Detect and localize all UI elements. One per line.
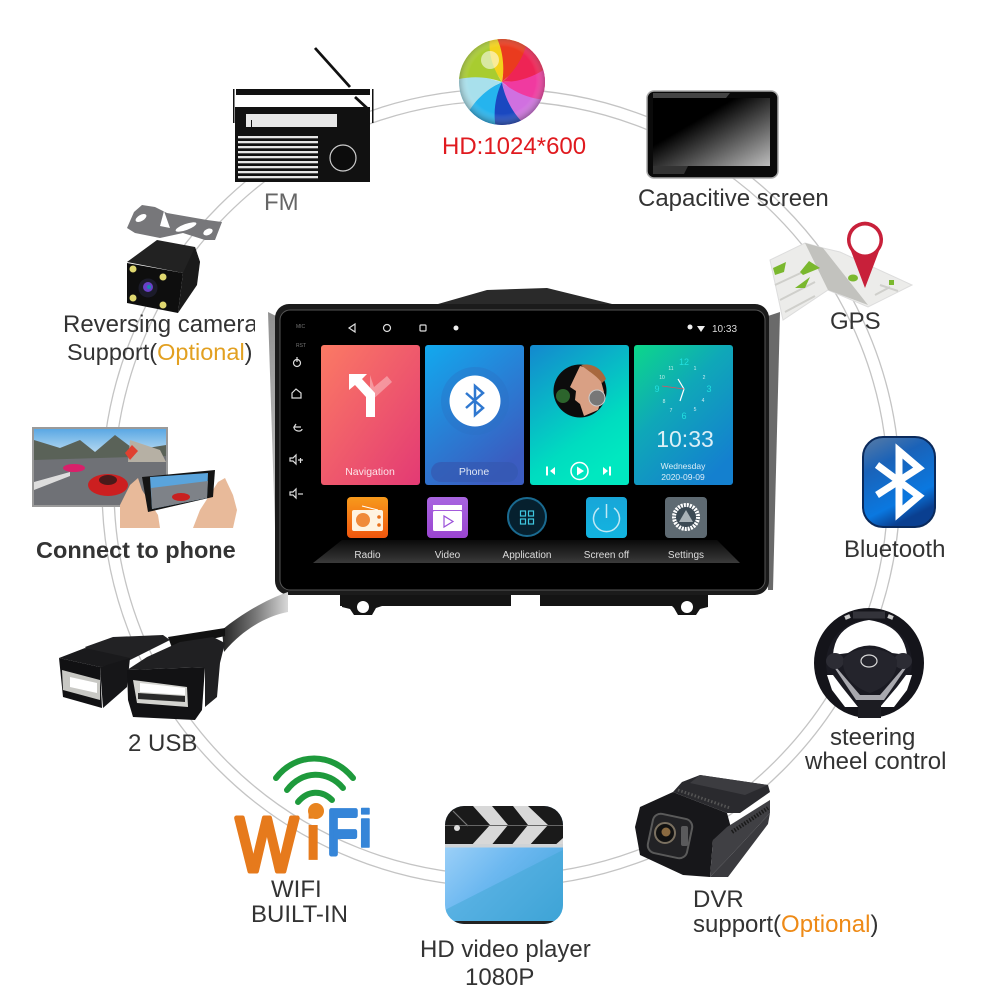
status bar: 10:33 — [712, 324, 737, 335]
label: DVR support: support(Optional) — [693, 911, 878, 938]
app: video: Video — [435, 550, 461, 561]
icon: WiFi logo: i — [304, 800, 322, 874]
icon: WiFi logo: F — [327, 798, 358, 868]
tile: clock: 9 — [654, 384, 660, 394]
tile: clock: 3 — [706, 384, 712, 394]
icon: WiFi logo: W — [236, 802, 298, 888]
icon: Bluetooth — [863, 437, 935, 527]
icon: video clapperboard — [445, 806, 563, 924]
app: radio: Radio — [354, 550, 381, 561]
upper window — [833, 620, 907, 655]
label: resolution: HD:1024*600 — [442, 133, 586, 160]
app: screen off — [584, 497, 629, 561]
tile: clock: 7 — [670, 408, 673, 414]
label: steering wheel control: steering — [830, 724, 915, 751]
label: reversing camera: Reversing camera — [63, 311, 258, 338]
label: WiFi built-in: WIFI — [271, 876, 322, 903]
tile: clock: 2020-09-09 — [661, 472, 705, 482]
label: GPS: GPS — [830, 308, 881, 335]
airbag hub — [843, 649, 897, 693]
icon: connect to phone — [32, 427, 237, 528]
app: application: Application — [503, 550, 551, 561]
label: DVR support: DVR — [693, 886, 744, 913]
tile: clock: Wednesday — [661, 461, 706, 471]
label: connect to phone: Connect to phone — [36, 537, 236, 563]
mounting brackets — [340, 594, 708, 615]
tile: clock: 10:33 — [656, 426, 714, 452]
tile: clock: 6 — [681, 411, 687, 421]
antenna — [315, 48, 368, 109]
app: settings: Settings — [668, 550, 704, 561]
spokes — [830, 660, 910, 700]
tile: clock: 12 — [679, 357, 689, 367]
app: radio — [347, 497, 388, 561]
label: steering wheel control — [804, 724, 946, 775]
top wedge of the fascia — [438, 288, 612, 304]
label: DVR support — [693, 886, 878, 938]
tile: phone: Phone — [459, 466, 489, 478]
icon: WiFi logo — [236, 758, 373, 888]
side buttons: RST — [296, 343, 306, 349]
tile: clock: 5 — [694, 407, 697, 413]
label: FM: FM — [264, 189, 299, 216]
app: application — [503, 498, 551, 561]
app: settings — [665, 497, 707, 561]
icon: colour ball — [459, 39, 545, 125]
tile: clock: 1 — [694, 366, 697, 372]
tile: navigation — [321, 345, 420, 485]
icon: steering wheel — [820, 614, 918, 718]
status bar — [349, 324, 737, 335]
tile: navigation: Navigation — [345, 466, 395, 478]
side pods — [826, 653, 844, 669]
label: HD video player: HD video player — [420, 936, 591, 963]
label: reversing camera — [63, 311, 258, 365]
label: HD video player — [420, 936, 591, 991]
label: HD video player: 1080P — [465, 964, 534, 991]
icon: USB cables — [59, 592, 288, 720]
dock shelf — [313, 540, 740, 563]
icon: WiFi logo: i — [358, 800, 373, 859]
icon: capacitive screen — [647, 91, 778, 178]
label: WiFi built-in: BUILT-IN — [251, 901, 348, 928]
tile: clock: 2 — [703, 375, 706, 381]
bracket — [127, 205, 222, 240]
tile: clock: 8 — [663, 399, 666, 405]
icon: FM radio — [233, 48, 374, 182]
tile: music — [530, 345, 629, 485]
tile: clock: 11 — [668, 366, 674, 372]
label: steering wheel control: wheel control — [804, 748, 946, 775]
app: screen off: Screen off — [584, 550, 629, 561]
right plug — [127, 637, 225, 707]
left plug — [85, 635, 170, 667]
label: Bluetooth: Bluetooth — [844, 536, 945, 563]
side flaps — [268, 312, 780, 590]
icon: dash camera DVR — [635, 775, 770, 877]
icon: reversing camera — [127, 205, 222, 313]
body and bezel — [275, 304, 769, 595]
label: capacitive screen: Capacitive screen — [638, 185, 829, 212]
tile: phone — [425, 345, 524, 485]
tile: clock — [634, 345, 733, 485]
label: reversing camera: Support(Optional) — [67, 339, 252, 365]
decorative rings — [102, 89, 900, 887]
lower windows — [827, 675, 858, 707]
app: video — [427, 497, 468, 561]
side buttons: MIC — [296, 324, 306, 330]
head unit — [268, 288, 780, 615]
tile: clock: 4 — [702, 398, 705, 404]
label: 2 USB: 2 USB — [128, 730, 197, 757]
icon: GPS map and pin — [770, 222, 912, 320]
tile: clock: 10 — [659, 375, 665, 381]
cable — [222, 592, 288, 652]
label: WiFi built-in — [251, 876, 348, 928]
side buttons — [290, 324, 306, 498]
